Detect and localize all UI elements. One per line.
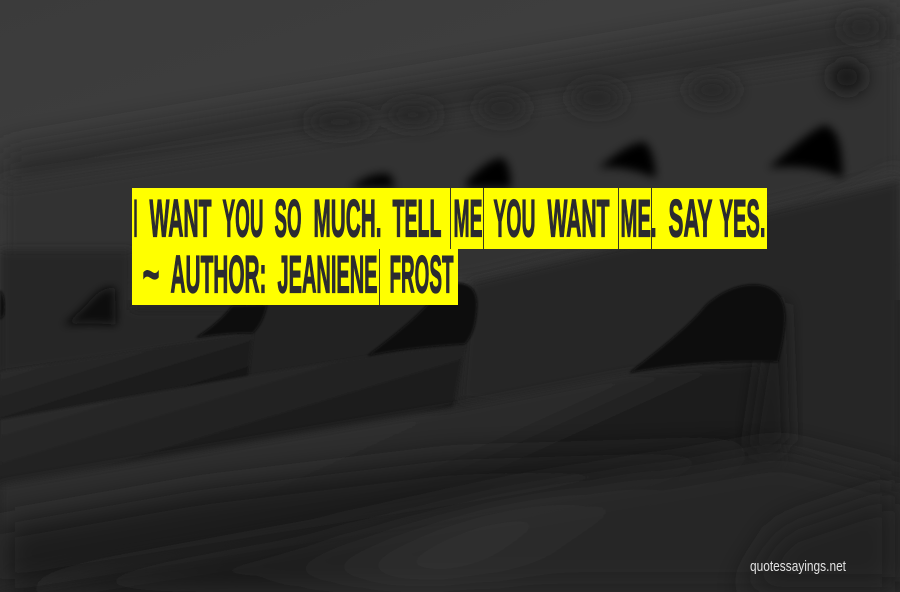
quote highlight bands bbox=[132, 188, 767, 305]
right panel bbox=[460, 180, 900, 490]
text: YES. bbox=[720, 190, 766, 248]
quote text: ME. bbox=[620, 190, 656, 248]
quote text: MUCH. bbox=[314, 190, 382, 248]
panel between arches bbox=[250, 290, 470, 380]
quote text: SAY bbox=[668, 190, 712, 248]
quote text: SO bbox=[274, 190, 302, 248]
quote text: YOU bbox=[494, 190, 536, 248]
watermark: quotessayings.net: quotessayings.net bbox=[750, 559, 846, 575]
quote text: ME bbox=[454, 190, 482, 248]
quote text: TELL bbox=[392, 190, 442, 248]
quote text: WANT bbox=[548, 190, 610, 248]
upper left panel bbox=[0, 250, 250, 375]
quote text: I bbox=[134, 190, 138, 248]
text: FROST bbox=[390, 246, 454, 304]
quote text: WANT bbox=[150, 190, 212, 248]
author attribution: ~ bbox=[142, 246, 160, 304]
quote text bbox=[134, 190, 766, 248]
quote text: YOU bbox=[222, 190, 264, 248]
rolled tube: lower bbox=[0, 362, 785, 592]
paper crease lines on the highlight bbox=[380, 188, 652, 305]
rolled tube: upper bbox=[0, 333, 253, 420]
dark arches bbox=[629, 285, 785, 373]
rolled tube: middle bbox=[0, 344, 465, 485]
author attribution: JEANIENE bbox=[278, 246, 378, 304]
author attribution: AUTHOR: bbox=[170, 246, 266, 304]
